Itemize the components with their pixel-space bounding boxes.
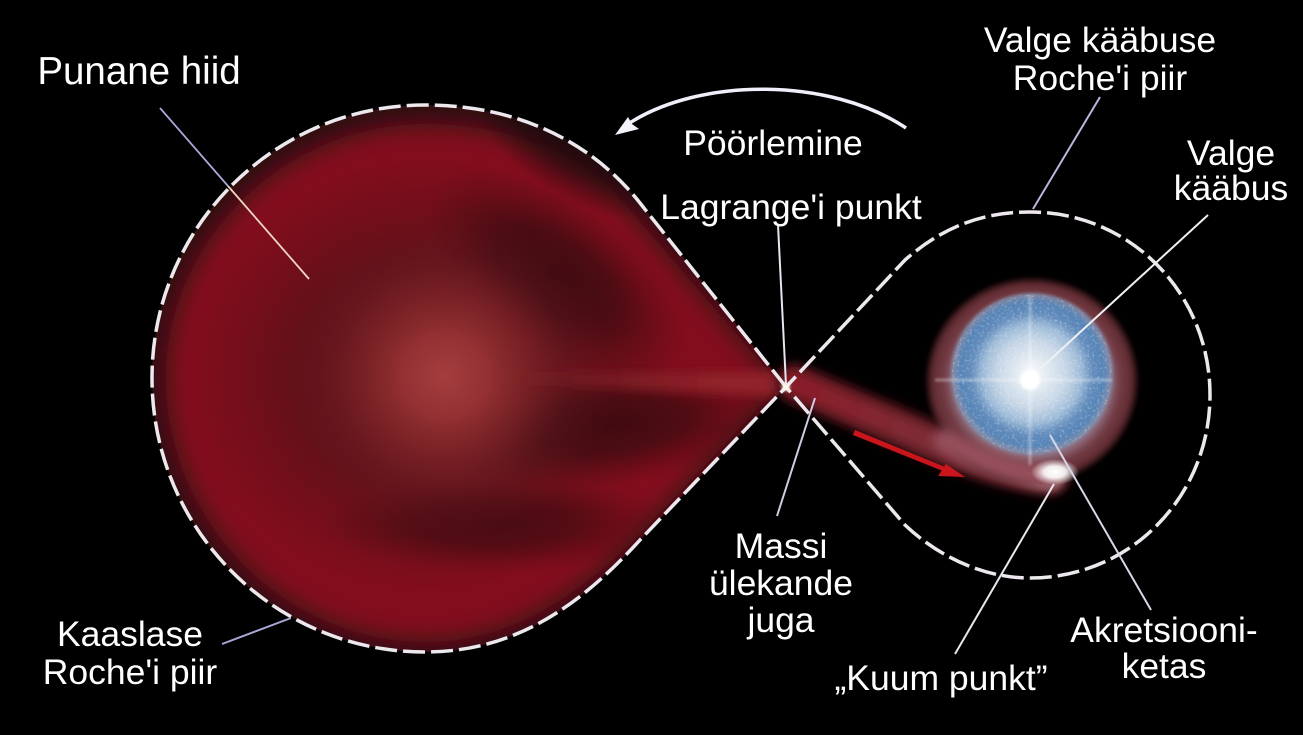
mass transfer stream	[795, 383, 1050, 476]
label: red giant: Punane hiid	[37, 50, 241, 93]
leader line: Lagrange point	[778, 225, 786, 385]
leader line: white dwarf Roche limit	[1033, 97, 1100, 209]
stream overlay on disk	[945, 440, 1050, 477]
hot spot	[1031, 459, 1079, 485]
Lagrange point spark	[782, 383, 790, 391]
label: white dwarf Roche limit: Valge kääbuse	[984, 20, 1216, 60]
label: companion Roche limit: Kaaslase	[57, 614, 203, 654]
label: hot spot: „Kuum punkt”	[834, 658, 1048, 698]
white dwarf core	[1020, 370, 1040, 390]
label: white dwarf Roche limit: Roche'i piir	[1013, 58, 1187, 98]
label: mass transfer stream: Massi	[735, 526, 827, 566]
label: mass transfer stream: juga	[746, 600, 815, 640]
label: mass transfer stream: ülekande	[709, 563, 853, 603]
Roche lobe dashed outline	[152, 105, 1210, 652]
star cross rays	[935, 295, 1112, 465]
label: white dwarf: kääbus	[1174, 168, 1288, 208]
speckled disk texture	[952, 294, 1112, 454]
label: white dwarf: Valge	[1187, 133, 1275, 173]
leader line: mass transfer stream	[777, 398, 815, 516]
label: accretion disk: Akretsiooni-	[1070, 610, 1258, 650]
label: companion Roche limit: Roche'i piir	[43, 652, 217, 692]
leader line: red giant	[160, 108, 309, 279]
label: accretion disk: ketas	[1122, 646, 1206, 686]
leader line: accretion disk	[1050, 435, 1151, 610]
leader line: companion Roche limit	[222, 618, 291, 644]
accretion disk	[924, 276, 1140, 494]
red arrow in stream	[853, 430, 965, 477]
leader line: hot spot	[955, 484, 1054, 654]
rotation arrow	[615, 89, 906, 135]
leader line: white dwarf	[1040, 215, 1208, 369]
label: rotation: Pöörlemine	[683, 123, 863, 163]
label: Lagrange point: Lagrange'i punkt	[660, 187, 922, 227]
white dwarf glow	[950, 292, 1114, 456]
red giant body	[152, 105, 782, 652]
